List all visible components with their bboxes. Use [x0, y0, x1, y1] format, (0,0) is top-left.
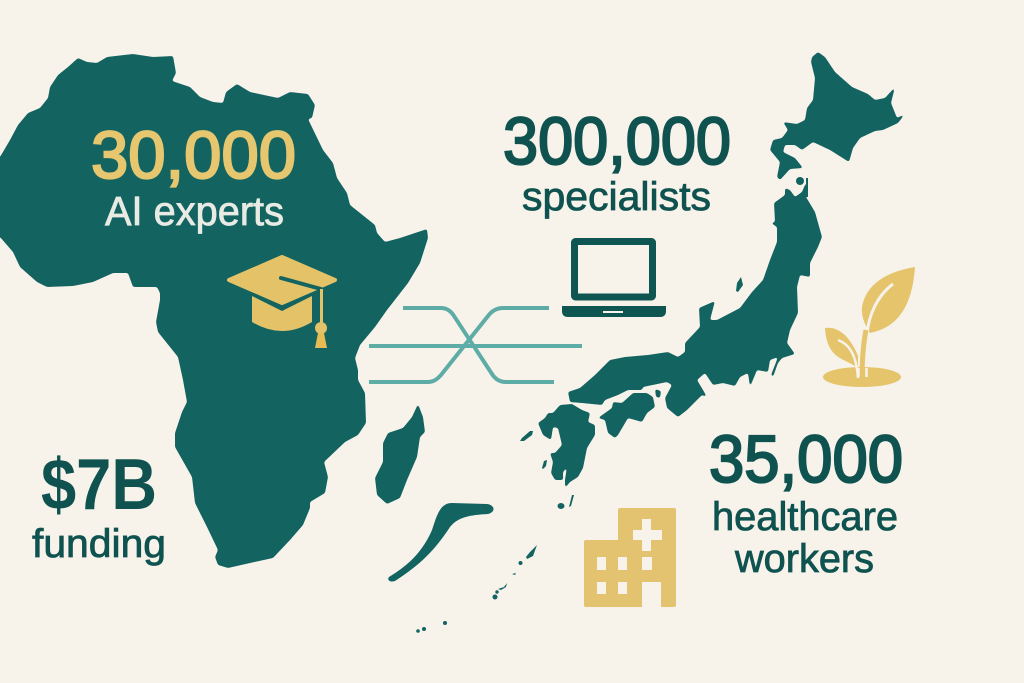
Honshu: [568, 180, 822, 417]
icon: plant: [823, 267, 915, 387]
stat: 30,000 AI experts: AI experts: [105, 188, 284, 234]
main islands: [538, 52, 905, 488]
map: Japan: [416, 52, 905, 633]
stat: 30,000 AI experts: [91, 118, 296, 234]
stat: 300,000 specialists: specialists: [522, 175, 711, 219]
stat: 35,000 healthcare workers: [709, 422, 903, 581]
map: Madagascar: [375, 404, 425, 504]
stat: 35,000 healthcare workers: healthcare: [712, 495, 898, 539]
southern islands: [498, 431, 574, 590]
stat: $7B funding: funding: [32, 522, 166, 566]
stat: 35,000 healthcare workers: workers: [734, 537, 874, 581]
stat: 300,000 specialists: 300,000: [503, 104, 731, 179]
stat: 300,000 specialists: [503, 104, 731, 219]
stat: $7B funding: $7B: [41, 445, 157, 525]
stat: $7B funding: [32, 445, 166, 566]
stat: 35,000 healthcare workers: 35,000: [709, 422, 903, 497]
icon: graduation cap: [229, 257, 335, 348]
map: boomerang island: [388, 503, 494, 582]
Shimokita tip: [796, 177, 804, 185]
Sado island: [736, 277, 743, 292]
Shikoku: [598, 393, 655, 438]
stat: 30,000 AI experts: 30,000: [91, 118, 296, 193]
Kyushu: [538, 404, 595, 488]
icon: laptop: [562, 242, 666, 317]
icon: hospital: [584, 508, 676, 607]
map: Africa: [0, 54, 428, 568]
Awaji: [655, 389, 661, 398]
connector lines: [369, 308, 582, 382]
Hokkaido: [770, 52, 905, 180]
